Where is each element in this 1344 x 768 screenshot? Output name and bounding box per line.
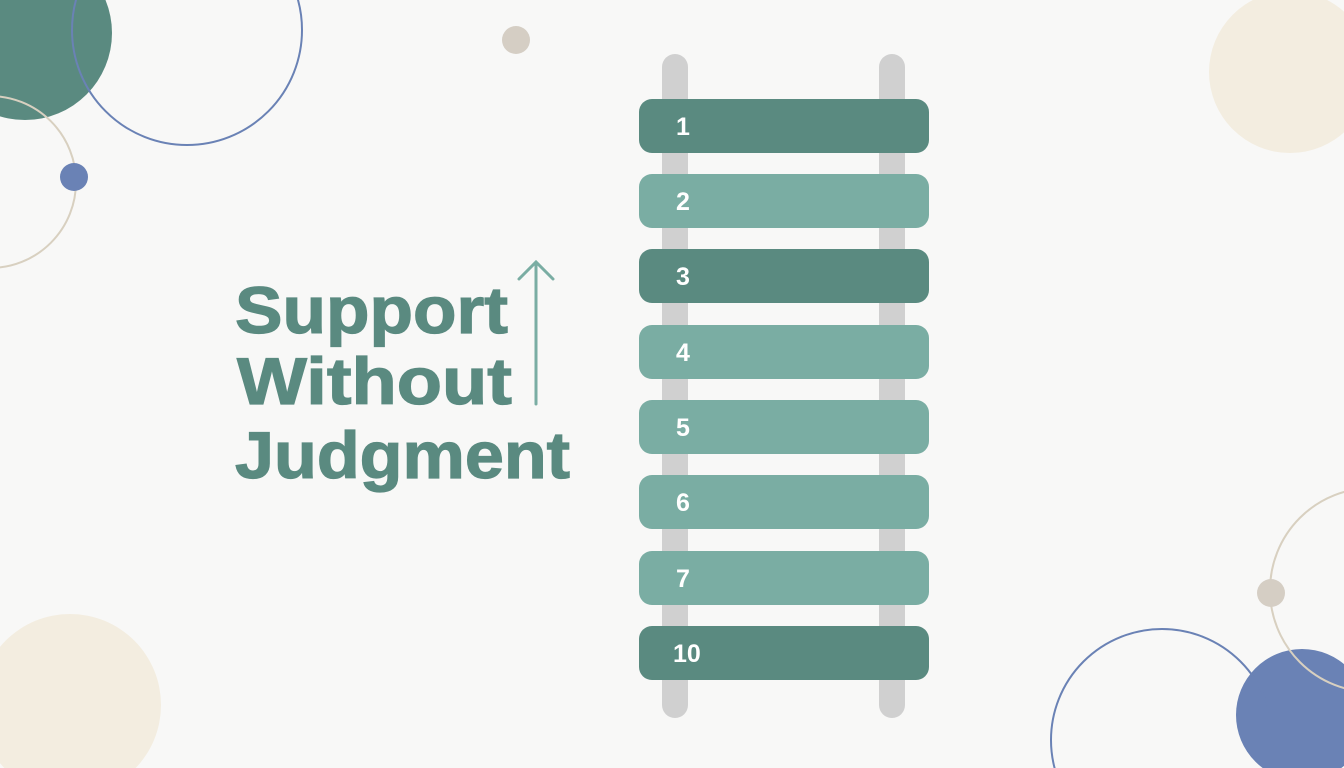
rungs: 10 bbox=[673, 640, 701, 668]
rungs: 5 bbox=[676, 414, 690, 442]
decoration: grey dot bbox=[502, 26, 530, 54]
rungs: 2 bbox=[676, 188, 690, 216]
title: Support bbox=[235, 273, 508, 347]
arrow: up bbox=[519, 262, 553, 404]
title: Judgment bbox=[235, 418, 570, 492]
title bbox=[235, 273, 570, 492]
decoration: bottom-right circles bbox=[1051, 488, 1344, 768]
rungs bbox=[639, 99, 929, 680]
title: Without bbox=[237, 344, 512, 418]
ladder bbox=[639, 54, 929, 718]
decoration: top-right beige circle bbox=[1209, 0, 1344, 153]
ladder rails bbox=[662, 54, 905, 718]
rungs: 7 bbox=[676, 565, 690, 593]
decoration: bottom-left beige circle bbox=[0, 614, 161, 768]
rungs: 1 bbox=[676, 113, 690, 141]
rungs: 4 bbox=[676, 339, 690, 367]
rungs: 3 bbox=[676, 263, 690, 291]
decoration: top-left circles bbox=[0, 0, 302, 268]
rungs: 6 bbox=[676, 489, 690, 517]
